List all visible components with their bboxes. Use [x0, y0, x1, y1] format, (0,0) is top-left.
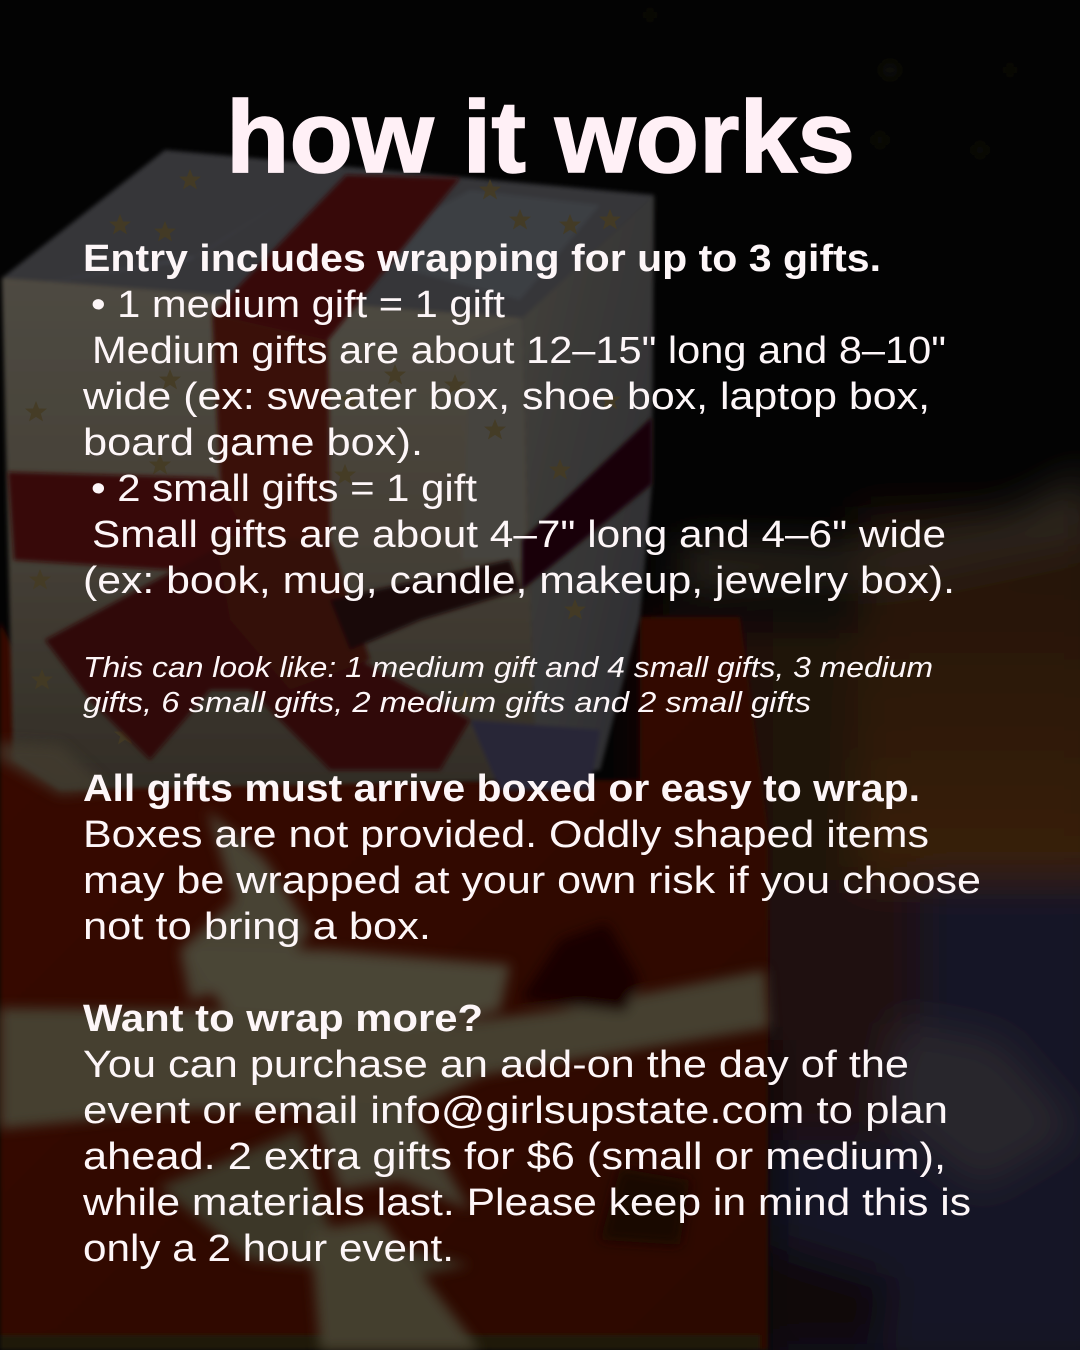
- stars on wrapping paper: [25, 169, 621, 744]
- text block: add-on option: Want to wrap more?: [83, 998, 483, 1040]
- white starred gift box: [2, 150, 654, 790]
- out-of-focus background gifts: [640, 470, 1080, 1350]
- text block: example combinations: gifts, 6 small gifts, 2 medium gifts and 2 small gifts: [83, 687, 811, 719]
- text block: entry and gift sizes: • 2 small gifts = 1 gift: [91, 468, 477, 510]
- text block: entry and gift sizes: board game box).: [83, 422, 423, 464]
- text block: entry and gift sizes: wide (ex: sweater box, shoe box, laptop box,: [82, 376, 930, 418]
- text block: boxing requirement: may be wrapped at your own risk if you choose: [83, 860, 981, 902]
- red gift box: [0, 617, 768, 1350]
- text block: example combinations: This can look like: 1 medium gift and 4 small gifts, 3 medium: [83, 652, 933, 684]
- text block: add-on option: only a 2 hour event.: [83, 1228, 454, 1270]
- dark red ribbon and bow: [8, 175, 652, 770]
- text block: add-on option: [82, 998, 971, 1270]
- text block: entry and gift sizes: [82, 238, 955, 602]
- text block: boxing requirement: [83, 768, 981, 948]
- text block: boxing requirement: Boxes are not provided. Oddly shaped items: [83, 814, 929, 856]
- text block: entry and gift sizes: Medium gifts are about 12–15" long and 8–10": [92, 330, 946, 372]
- text block: boxing requirement: not to bring a box.: [83, 906, 431, 948]
- text block: add-on option: ahead. 2 extra gifts for $6 (small or medium),: [83, 1136, 946, 1178]
- text block: entry and gift sizes: • 1 medium gift = 1 gift: [91, 284, 505, 326]
- cream and gold ribbon on red box: [0, 742, 769, 1350]
- text block: entry and gift sizes: Small gifts are about 4–7" long and 4–6" wide: [92, 514, 946, 556]
- text block: entry and gift sizes: (ex: book, mug, candle, makeup, jewelry box).: [83, 560, 955, 602]
- text block: add-on option: You can purchase an add-on the day of the: [83, 1044, 909, 1086]
- text block: add-on option: event or email info@girlsupstate.com to plan: [83, 1090, 948, 1132]
- text block: add-on option: while materials last. Please keep in mind this is: [82, 1182, 971, 1224]
- title: how it works: [226, 80, 855, 194]
- distant lights: [645, 10, 1015, 156]
- text block: entry and gift sizes: Entry includes wrapping for up to 3 gifts.: [83, 238, 881, 280]
- text block: example combinations: [83, 652, 933, 719]
- text block: boxing requirement: All gifts must arrive boxed or easy to wrap.: [83, 768, 920, 810]
